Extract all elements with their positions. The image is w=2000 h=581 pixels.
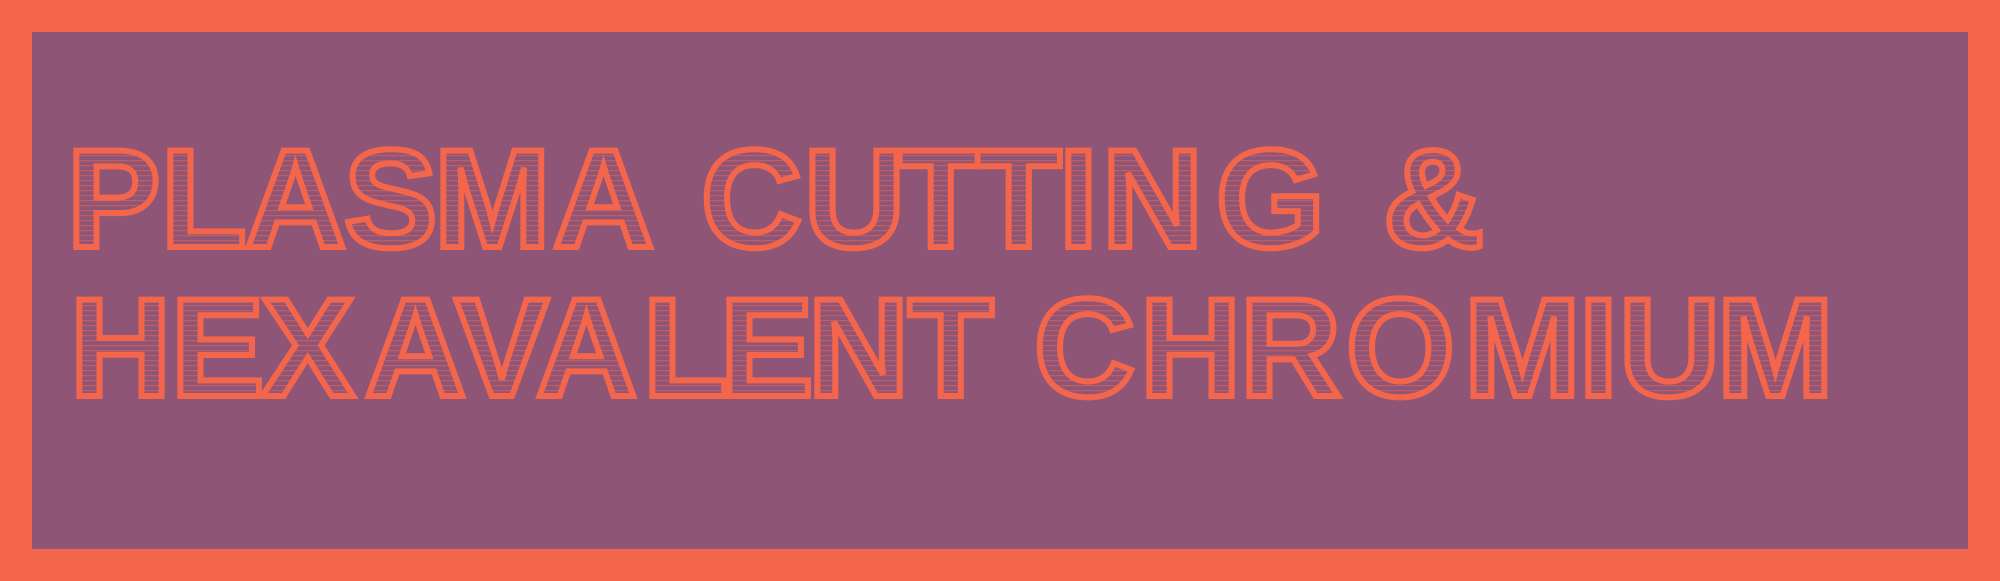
title	[67, 120, 1834, 426]
title line 2: HEXAVALENT CHROMIUM	[70, 269, 1834, 426]
title line 1: PLASMA CUTTING &	[67, 120, 1484, 277]
